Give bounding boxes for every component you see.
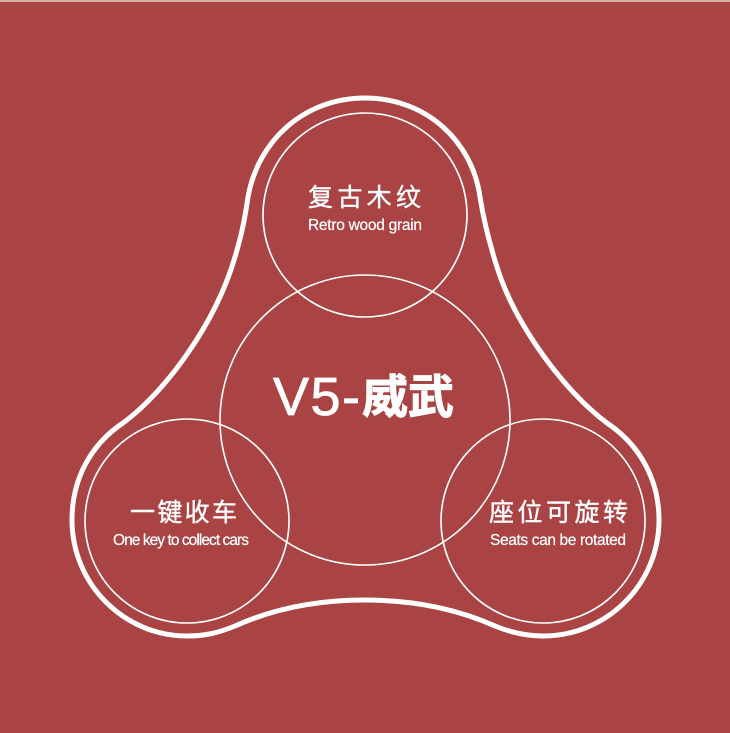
top label bbox=[308, 184, 422, 234]
circle: right feature bbox=[441, 419, 645, 623]
center title: 威武 bbox=[362, 371, 454, 423]
circle: top feature bbox=[263, 113, 467, 317]
right label: 座位可旋转 bbox=[489, 499, 628, 527]
top label: Retro wood grain bbox=[308, 217, 422, 234]
right label: Seats can be rotated bbox=[490, 532, 626, 549]
outer rounded trefoil outline bbox=[72, 98, 659, 636]
circle: left feature bbox=[85, 419, 289, 623]
right label bbox=[489, 499, 628, 549]
center title bbox=[273, 367, 454, 427]
center title: V5- bbox=[273, 367, 360, 427]
left label: 一键收车 bbox=[130, 499, 237, 527]
left label: One key to collect cars bbox=[113, 532, 249, 549]
top label: 复古木纹 bbox=[308, 184, 421, 212]
left label bbox=[113, 499, 249, 549]
circle: center bbox=[220, 275, 510, 565]
